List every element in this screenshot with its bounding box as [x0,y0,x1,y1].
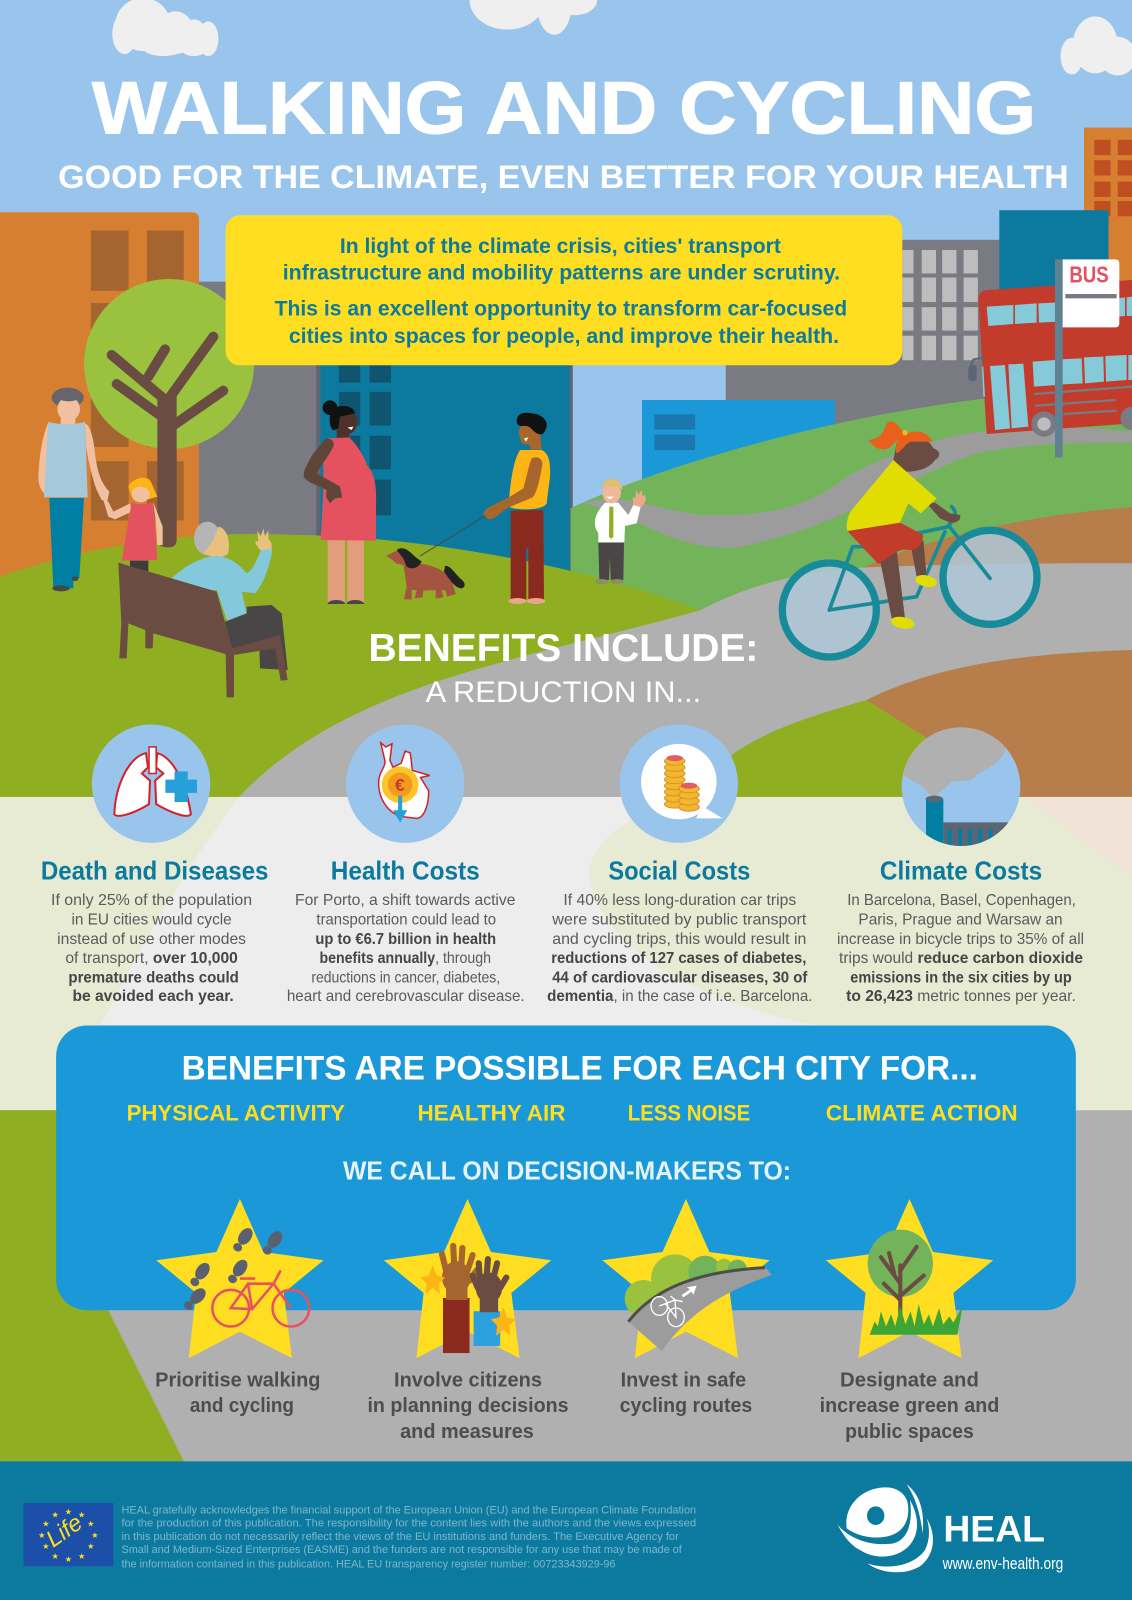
EU Life logo: ★ [78,1552,85,1561]
rider legs [880,550,905,618]
column: social costs: reductions of 127 cases of diabetes, [551,949,806,967]
column: climate costs: to 26,423 metric tonnes per year. [846,987,1076,1005]
column: death and diseases: If only 25% of the population [51,891,252,909]
EU Life logo: ★ [51,1510,59,1519]
column: death and diseases: Death and Diseases [41,858,268,886]
peach patch [1024,797,1132,878]
subtitle: GOOD FOR THE CLIMATE, EVEN BETTER FOR YOUR HEALTH [58,158,1069,195]
man head [194,522,221,555]
acknowledgement text [121,1504,696,1570]
man hand [255,528,272,550]
column: social costs [547,858,813,1005]
column: health costs: heart and cerebrovascular disease. [287,987,525,1005]
lower grey road [0,1110,1132,1461]
EU Life logo: ★ [65,1555,72,1564]
rider shirt [847,460,937,531]
column: social costs: and cycling trips, this would result in [552,930,806,948]
brown lower area [867,650,1132,797]
column: social costs: were substituted by public transport [551,910,807,928]
column: health costs: up to €6.7 billion in health [315,930,496,948]
title: WALKING AND CYCLING [92,67,1036,150]
action: green spaces [820,1199,999,1443]
icon: coins in speech bubble [620,724,738,843]
road illustration [625,1254,772,1351]
building: bright blue [642,400,835,522]
action: safe cycling routes [602,1199,772,1417]
bicycle wheels [782,563,876,657]
EU Life logo: ★ [91,1531,99,1540]
column: climate costs: trips would reduce carbon dioxide [839,949,1083,967]
caption: Invest in safe [621,1370,746,1392]
road bicycle marking [651,1296,684,1327]
caption [367,1370,569,1443]
EU Life logo: ★ [51,1552,59,1561]
call heading: WE CALL ON DECISION-MAKERS TO: [343,1158,791,1186]
bus [968,280,1132,437]
column: health costs: reductions in cancer, diabetes, [311,969,500,987]
column: death and diseases [41,858,268,1005]
grass [870,1304,963,1335]
clouds [112,0,1132,76]
column: climate costs: In Barcelona, Basel, Copenhagen, [847,891,1076,909]
column: climate costs [837,858,1084,1005]
tree [868,1230,933,1327]
rider shorts [847,523,923,564]
light path [61,797,817,1110]
acknowledgement text: the information contained in this publication. HEAL EU transparency register number: 00723343929-96 [121,1558,616,1570]
caption: cycling routes [620,1395,752,1417]
bicycle [212,1270,309,1327]
person: pregnant woman [304,400,376,604]
column: death and diseases: be avoided each year. [72,987,234,1005]
hills and roads [0,507,1132,1461]
person: woman with grey hair [38,388,109,591]
building: grey right [726,240,1001,474]
acknowledgement text: HEAL gratefully acknowledges the financial support of the European Union (EU) and the European Climate Foundation [121,1504,696,1516]
person: child [103,478,163,577]
small stars [421,1265,515,1336]
dog [386,548,465,599]
column: climate costs: increase in bicycle trips to 35% of all [837,930,1084,948]
EU Life logo: ★ [38,1531,46,1540]
yellow intro box: In light of the climate crisis, cities' transport [340,234,781,258]
caption: Prioritise walking [155,1370,321,1392]
HEAL logo [837,1484,1063,1573]
column: health costs: Health Costs [331,858,480,886]
column: death and diseases: premature deaths could [68,969,239,987]
caption: Involve citizens [394,1370,542,1392]
caption [155,1370,321,1417]
acknowledgement text: in this publication do not necessarily reflect the views of the EU institutions and funders. The Executive Agency for [121,1531,679,1543]
dog leash [420,516,485,556]
hill: right green [571,393,1132,653]
buildings [0,128,1132,592]
EU Life logo: ★ [42,1520,50,1529]
rider hair [896,432,933,453]
EU Life logo: ★ [42,1542,50,1551]
bushes [625,1254,747,1317]
icon: factory chimney and smoke [902,727,1020,846]
icon: lungs [92,724,210,843]
yellow intro box: cities into spaces for people, and improve their health. [289,324,839,348]
pale lower ground [0,797,1132,1110]
column: social costs: dementia, in the case of i.e. Barcelona. [547,987,813,1005]
action: involve citizens [367,1199,569,1443]
olive ground [0,534,1132,797]
benefit categories: HEALTHY AIR [417,1100,565,1125]
benefit categories: PHYSICAL ACTIVITY [127,1100,345,1125]
lower olive [0,1110,184,1461]
bench [118,563,288,697]
acknowledgement text: Small and Medium-Sized Enterprises (EASME) and the funders are not responsible for any use that may be made of [121,1544,682,1556]
building: orange right [1084,128,1132,362]
benefit categories [127,1100,1018,1125]
column: climate costs: Paris, Prague and Warsaw an [858,910,1063,928]
building: teal centre [316,347,573,582]
caption: and measures [400,1421,534,1443]
man shirt [168,548,272,621]
column: death and diseases: instead of use other modes [57,930,246,948]
rider head [893,436,939,472]
caption [820,1370,999,1443]
caption [620,1370,752,1417]
column: social costs: If 40% less long-duration car trips [563,891,796,909]
yellow intro box: infrastructure and mobility patterns are under scrutiny. [283,261,840,285]
brown strip [859,507,1132,571]
yellow intro box: This is an excellent opportunity to transform car-focused [275,296,847,320]
benefits heading: BENEFITS INCLUDE: [368,627,758,670]
column: death and diseases: of transport, over 10,000 [65,949,238,967]
yellow intro box [226,215,902,365]
blue panel [56,1026,1076,1310]
rider arm [927,503,960,523]
tree [84,279,254,547]
caption: increase green and [820,1395,999,1417]
caption: in planning decisions [367,1395,569,1417]
panel heading: BENEFITS ARE POSSIBLE FOR EACH CITY FOR... [182,1050,978,1088]
column: social costs: 44 of cardiovascular diseases, 30 of [552,969,808,987]
person: small man waving [595,479,646,584]
logo swoosh [837,1484,933,1572]
bicycle frame [829,507,990,610]
caption: Designate and [840,1370,979,1392]
footprints [181,1225,285,1313]
action: walking and cycling [155,1199,324,1417]
bus stop [1055,259,1119,457]
column: social costs: Social Costs [608,858,750,886]
winding road [583,428,1132,548]
star [384,1199,551,1358]
big road [239,563,1132,797]
EU Life logo [23,1503,113,1566]
EU Life logo: ★ [87,1542,95,1551]
column: health costs [287,858,525,1005]
bus stop: BUS [1069,262,1109,288]
footer [0,1461,1132,1600]
column: death and diseases: in EU cities would cycle [71,910,232,928]
logo wordmark: HEAL [943,1508,1045,1550]
column: health costs: transportation could lead to [316,910,496,928]
road arrow [682,1286,697,1297]
column: climate costs: emissions in the six cities by up [850,969,1072,987]
EU Life logo: Life [41,1509,87,1552]
star [826,1199,993,1358]
raised hands [442,1246,506,1353]
man trousers [225,605,288,670]
acknowledgement text: for the production of this publication. The responsibility for the content lies with the authors and the views expressed [121,1518,696,1530]
column: health costs: For Porto, a shift towards active [295,891,516,909]
cyclist [782,421,1037,657]
road [628,1267,772,1351]
icon: heart and euro: € [395,775,405,795]
column: climate costs: Climate Costs [880,858,1042,886]
star [602,1199,770,1358]
benefits subheading: A REDUCTION IN... [426,676,701,709]
left scene [38,279,288,697]
star [156,1199,324,1358]
middle scene [304,400,646,604]
icon: heart and euro [346,724,464,843]
EU Life logo: ★ [87,1520,95,1529]
logo url: www.env-health.org [942,1555,1063,1573]
building: teal right [999,210,1109,333]
sky background [0,0,1132,816]
EU Life logo: ★ [65,1507,72,1516]
person: man walking dog [386,413,550,604]
person: older man on bench [118,522,288,697]
benefit categories: CLIMATE ACTION [826,1100,1018,1125]
EU Life logo: ★ [78,1510,85,1519]
benefit categories: LESS NOISE [628,1100,750,1125]
caption: and cycling [190,1395,294,1417]
building: grey left [199,282,322,557]
caption: public spaces [845,1421,974,1443]
building: orange left [0,212,199,592]
column: health costs: benefits annually, through [319,949,491,967]
